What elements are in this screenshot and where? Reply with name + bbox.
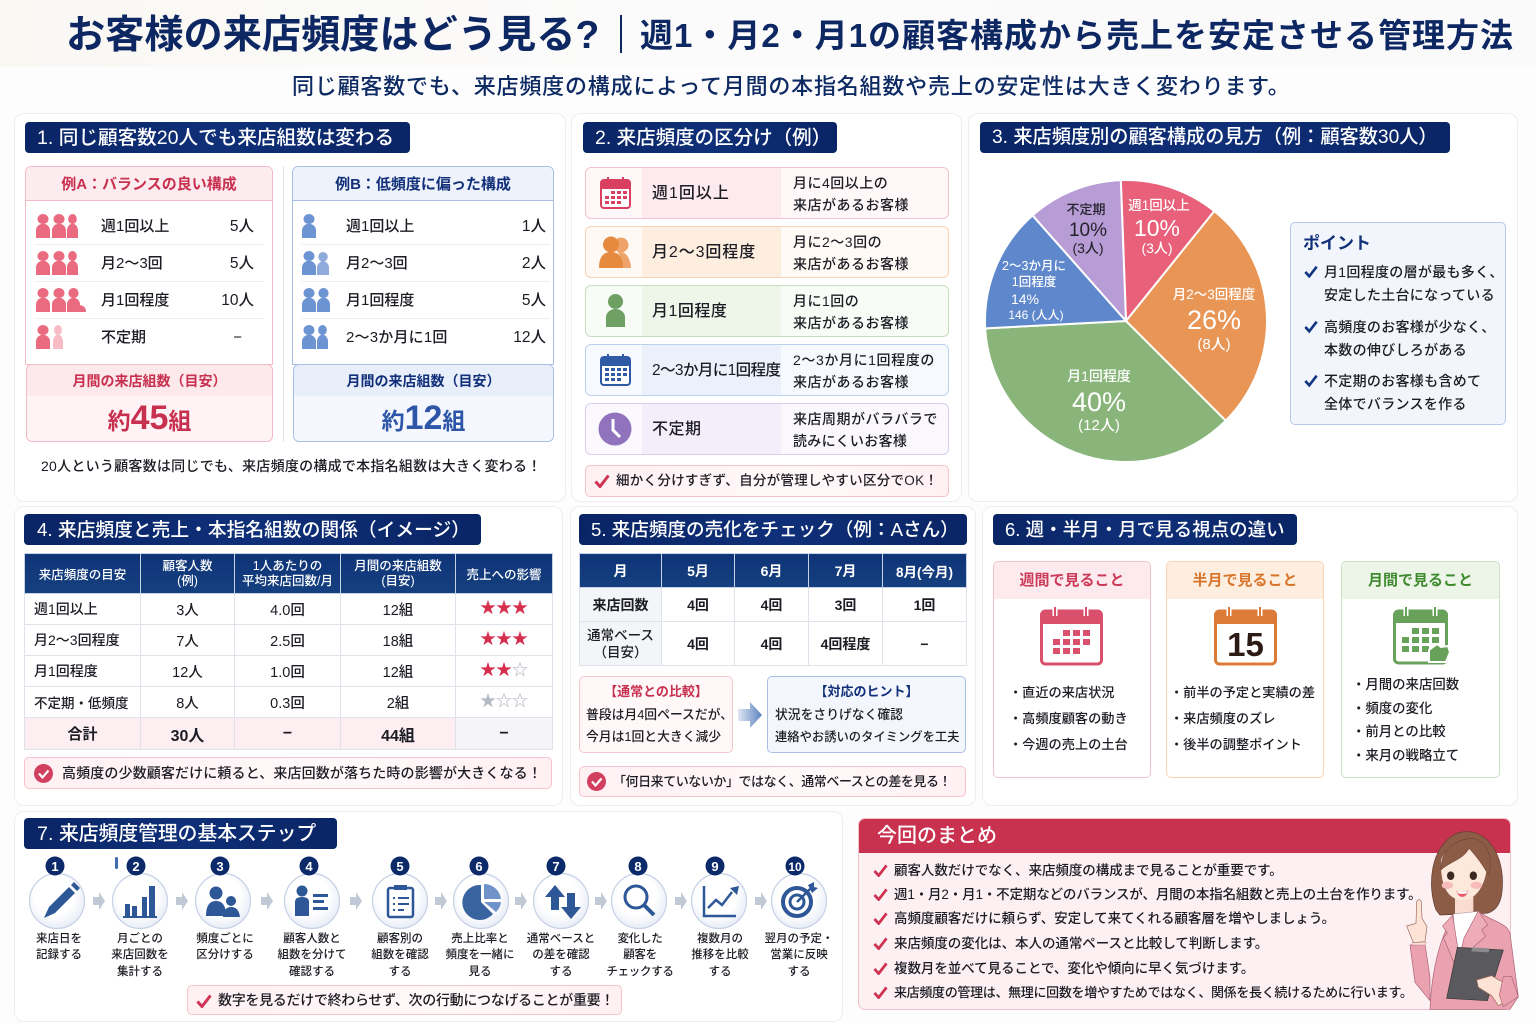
summary checks bbox=[874, 864, 888, 999]
points box: 全体でバランスを作る bbox=[1324, 396, 1467, 412]
table: frequency and sales: 月2〜3回程度 bbox=[34, 632, 120, 648]
step labels: 区分けする bbox=[196, 949, 254, 961]
card: half month: ・来店頻度のズレ bbox=[1170, 711, 1276, 726]
step labels: 組数を確認 bbox=[371, 949, 429, 961]
note 5: 「何日来ていないか」ではなく、通常ベースとの差を見る！ bbox=[613, 774, 951, 789]
steps note bbox=[187, 985, 622, 1015]
steps graphic: 9 bbox=[711, 859, 719, 874]
heading 4 bbox=[24, 514, 481, 545]
panel: 4 relation bbox=[14, 506, 563, 806]
table: A-san visits: 4回 bbox=[761, 636, 782, 652]
steps note: 数字を見るだけで終わらせず、次の行動につなげることが重要！ bbox=[218, 992, 614, 1008]
heading 6: 6. 週・半月・月で見る視点の違い bbox=[1005, 519, 1285, 540]
summary list bbox=[894, 863, 1421, 1000]
table: frequency and sales: 1.0回 bbox=[270, 664, 305, 680]
card: half month: ・後半の調整ポイント bbox=[1170, 737, 1302, 752]
panel: 6 viewpoints bbox=[982, 506, 1518, 806]
heading 5: 5. 来店頻度の売化をチェック（例：Aさん） bbox=[591, 519, 959, 540]
table: frequency and sales: 30人 bbox=[171, 728, 204, 744]
table: frequency and sales: 7人 bbox=[176, 634, 199, 650]
step labels: 見る bbox=[468, 966, 492, 978]
example A heading bbox=[26, 167, 272, 201]
result A bbox=[26, 364, 273, 442]
heading 3: 3. 来店頻度別の顧客構成の見方（例：顧客数30人） bbox=[992, 127, 1438, 148]
example B card bbox=[292, 166, 554, 365]
table: A-san visits: （目安） bbox=[594, 644, 648, 660]
segment tip bbox=[585, 465, 949, 497]
table: frequency and sales: 2組 bbox=[387, 696, 409, 712]
pie chart: 14% bbox=[1011, 291, 1039, 307]
table: frequency and sales: 合計 bbox=[67, 726, 98, 743]
segment row: quarterly: 2〜3か月に1回程度 bbox=[652, 362, 780, 379]
example A rows: 週1回以上 bbox=[101, 218, 169, 235]
arrows updown bbox=[545, 885, 581, 919]
segment row: monthly: 来店があるお客様 bbox=[793, 315, 909, 331]
example A card bbox=[25, 166, 273, 365]
pie chart: (3人) bbox=[1141, 240, 1173, 256]
card: weekly: ・直近の来店状況 bbox=[1009, 685, 1114, 700]
clipboard bbox=[388, 888, 413, 917]
example A rows: 5人 bbox=[230, 255, 254, 272]
steps graphic: 7 bbox=[552, 859, 560, 874]
step labels: 売上比率と bbox=[451, 933, 509, 945]
segment row: 2-3 monthly: 月2〜3回程度 bbox=[652, 244, 756, 261]
segment row: irregular bbox=[585, 403, 949, 455]
heading 7 bbox=[24, 818, 337, 849]
table: A-san visits: 通常ベース bbox=[587, 628, 654, 642]
card: monthly: 月間で見ること bbox=[1368, 572, 1473, 589]
example B rows: 5人 bbox=[522, 292, 546, 309]
example A heading: 例A：バランスの良い構成 bbox=[61, 176, 237, 193]
heading 7: 7. 来店頻度管理の基本ステップ bbox=[37, 823, 316, 845]
table: frequency and sales: ★★☆ bbox=[480, 662, 528, 679]
example B rows bbox=[302, 218, 550, 346]
result B: 月間の来店組数（目安） bbox=[346, 373, 500, 389]
step labels: 頻度を一緒に bbox=[446, 949, 514, 961]
lead sentence: 同じ顧客数でも、来店頻度の構成によって月間の本指名組数や売上の安定性は大きく変わります。 bbox=[292, 74, 1291, 99]
step labels: 組数を分けて bbox=[278, 949, 346, 961]
card: monthly: ・月間の来店回数 bbox=[1352, 677, 1459, 692]
table: A-san visits: 1回 bbox=[914, 596, 935, 612]
table: A-san visits bbox=[579, 553, 967, 666]
icon: green person bbox=[606, 294, 625, 327]
heading 1: 1. 同じ顧客数20人でも来店組数は変わる bbox=[37, 127, 394, 149]
steps graphic: 1 bbox=[51, 859, 59, 874]
table: frequency and sales: − bbox=[499, 724, 509, 742]
example B rows: 2〜3か月に1回 bbox=[346, 329, 448, 346]
example A rows bbox=[35, 218, 263, 346]
summary panel bbox=[858, 818, 1511, 1010]
step labels: の差を確認 bbox=[532, 949, 590, 961]
pie chart: 月2〜3回程度 bbox=[1173, 287, 1256, 302]
table: A-san visits: 4回 bbox=[687, 636, 709, 652]
pie chart: 2〜3か月に bbox=[1002, 259, 1066, 273]
table: frequency and sales: 2.5回 bbox=[270, 634, 305, 650]
segment tip: 細かく分けすぎず、自分が管理しやすい区分でOK！ bbox=[616, 473, 938, 488]
step labels: 営業に反映 bbox=[770, 949, 828, 961]
points heading: ポイント bbox=[1303, 234, 1371, 253]
pie chart: 40% bbox=[1072, 387, 1126, 417]
summary list: 週1・月2・月1・不定期などのバランスが、月間の本指名組数と売上の土台を作ります。 bbox=[894, 887, 1421, 902]
steps graphic: 6 bbox=[475, 859, 483, 874]
table: frequency and sales: 12組 bbox=[383, 664, 413, 680]
table: frequency and sales: 12人 bbox=[172, 664, 203, 680]
icon: calendar 15: 15 bbox=[1227, 626, 1264, 663]
panel: 1 same customers bbox=[14, 113, 566, 502]
steps graphic: 8 bbox=[634, 859, 642, 874]
summary list: 顧客人数だけでなく、来店頻度の構成まで見ることが重要です。 bbox=[894, 863, 1283, 878]
card: weekly: ・高頻度顧客の動き bbox=[1009, 711, 1128, 726]
card: monthly bbox=[1341, 561, 1500, 778]
pie icon bbox=[462, 885, 493, 920]
example B rows: 1人 bbox=[522, 218, 546, 235]
steps graphic bbox=[28, 856, 828, 930]
example B rows: 月1回程度 bbox=[346, 292, 414, 309]
table: frequency and sales: ★★★ bbox=[480, 631, 528, 648]
segment row: 2-3 monthly bbox=[585, 226, 949, 278]
steps graphic: 3 bbox=[216, 859, 224, 874]
card: half month: 半月で見ること bbox=[1192, 572, 1298, 589]
pie chart: (12人) bbox=[1078, 417, 1120, 434]
title band bbox=[0, 0, 1536, 67]
step labels: 顧客人数と bbox=[283, 933, 341, 945]
table: A-san visits: 4回程度 bbox=[821, 636, 870, 652]
panel: 2 segments bbox=[571, 113, 962, 502]
table: frequency and sales: (例) bbox=[177, 574, 198, 588]
card: weekly: 週間で見ること bbox=[1019, 572, 1124, 589]
card: monthly: ・前月との比較 bbox=[1352, 724, 1446, 739]
segment row: weekly bbox=[585, 167, 949, 219]
step labels: 顧客を bbox=[623, 949, 657, 961]
step labels: 来店回数を bbox=[111, 949, 169, 961]
table: A-san visits: − bbox=[920, 636, 929, 652]
hint box bbox=[767, 676, 966, 753]
panel: 7 steps bbox=[14, 811, 843, 1022]
step labels: する bbox=[708, 966, 732, 978]
bars bbox=[125, 904, 130, 916]
card: weekly bbox=[993, 561, 1151, 778]
table: frequency and sales: 月1回程度 bbox=[34, 663, 98, 679]
pencil bbox=[44, 882, 80, 918]
character illustration bbox=[1406, 831, 1519, 1010]
list person bbox=[296, 886, 308, 896]
segment row: irregular: 読みにくいお客様 bbox=[793, 433, 907, 449]
segment row: 2-3 monthly: 来店があるお客様 bbox=[793, 256, 909, 272]
example B rows: 12人 bbox=[513, 329, 546, 346]
example A rows: 不定期 bbox=[101, 329, 146, 346]
example A rows: 5人 bbox=[230, 218, 254, 235]
points box bbox=[1290, 222, 1506, 425]
steps graphic: 4 bbox=[305, 859, 313, 874]
table: frequency and sales bbox=[24, 553, 553, 750]
table: frequency and sales: ★★★ bbox=[480, 600, 528, 617]
segment row: quarterly bbox=[585, 344, 949, 396]
card: half month: ・前半の予定と実績の差 bbox=[1170, 685, 1315, 700]
step labels: 頻度ごとに bbox=[196, 933, 254, 945]
magnifier bbox=[625, 886, 647, 908]
card: weekly: ・今週の売上の土台 bbox=[1009, 737, 1128, 752]
title divider bbox=[620, 15, 622, 53]
points box: 本数の伸びしろがある bbox=[1324, 342, 1467, 358]
segment row: monthly bbox=[585, 285, 949, 337]
example A rows: 月2〜3回 bbox=[101, 255, 163, 272]
step labels: 変化した bbox=[618, 933, 662, 945]
heading 5 bbox=[579, 514, 967, 545]
pie chart: 週1回以上 bbox=[1128, 198, 1190, 213]
segment row: weekly: 週1回以上 bbox=[652, 185, 730, 202]
example A rows: 月1回程度 bbox=[101, 292, 169, 309]
table: frequency and sales: − bbox=[283, 724, 292, 742]
people bbox=[210, 886, 222, 900]
step labels: する bbox=[788, 966, 810, 978]
icon: orange people bbox=[599, 236, 631, 268]
step labels: 通常ベースと bbox=[527, 933, 595, 945]
table: frequency and sales: 不定期・低頻度 bbox=[34, 696, 128, 711]
segment row: quarterly: 2〜3か月に1回程度の bbox=[793, 352, 935, 368]
result A: 約45組 bbox=[108, 399, 191, 437]
heading 2 bbox=[583, 122, 837, 153]
table: A-san visits: 6月 bbox=[761, 562, 782, 578]
step labels: 記録する bbox=[36, 949, 82, 961]
result B bbox=[293, 364, 554, 442]
result A: 月間の来店組数（目安） bbox=[72, 373, 226, 389]
segment row: irregular: 来店周期がバラバラで bbox=[793, 411, 938, 427]
segment row: monthly: 月に1回の bbox=[793, 293, 859, 309]
arrow bbox=[738, 702, 762, 728]
pie chart: (8人) bbox=[1197, 336, 1231, 353]
points box: 高頻度のお客様が少なく、 bbox=[1324, 319, 1496, 335]
card: monthly: ・来月の戦略立て bbox=[1352, 748, 1459, 763]
step labels: 集計する bbox=[117, 966, 163, 978]
step labels: 推移を比較 bbox=[691, 949, 749, 961]
panel: 5 change check bbox=[570, 506, 976, 806]
table: frequency and sales: 月間の来店組数 bbox=[354, 558, 442, 572]
table: frequency and sales: ★☆☆ bbox=[480, 693, 528, 710]
icons: people A bbox=[36, 214, 86, 349]
pie chart: 10% bbox=[1134, 215, 1180, 241]
table: frequency and sales: 12組 bbox=[383, 602, 413, 618]
summary list: 来店頻度の管理は、無理に回数を増やすためではなく、関係を長く続けるために行います。 bbox=[894, 985, 1413, 1000]
heading 2: 2. 来店頻度の区分け（例） bbox=[595, 127, 831, 149]
step labels: 顧客別の bbox=[377, 933, 423, 945]
card: monthly: ・頻度の変化 bbox=[1352, 701, 1432, 716]
table: frequency and sales: 4.0回 bbox=[270, 602, 305, 618]
pie chart: 146 (人人) bbox=[1008, 308, 1064, 322]
pie chart: 月1回程度 bbox=[1067, 368, 1131, 384]
hint box: 連絡やお誘いのタイミングを工夫 bbox=[775, 730, 959, 744]
table: frequency and sales: 3人 bbox=[176, 602, 199, 618]
table: frequency and sales: (目安) bbox=[381, 574, 415, 588]
table: A-san visits: 7月 bbox=[835, 562, 856, 578]
pie chart: 不定期 bbox=[1066, 202, 1106, 217]
table: A-san visits: 4回 bbox=[687, 596, 709, 612]
segment row: irregular: 不定期 bbox=[652, 421, 702, 438]
hint box: 状況をさりげなく確認 bbox=[775, 707, 903, 722]
target bbox=[783, 888, 811, 916]
table: A-san visits: 4回 bbox=[761, 596, 782, 612]
steps graphic: 5 bbox=[396, 859, 404, 874]
step labels: 月ごとの bbox=[117, 933, 163, 945]
result B: 約12組 bbox=[382, 399, 465, 437]
steps graphic: 10 bbox=[788, 860, 802, 874]
example B rows: 2人 bbox=[522, 255, 546, 272]
compare box bbox=[579, 676, 733, 753]
line chart bbox=[704, 886, 736, 916]
summary list: 複数月を並べて見ることで、変化や傾向に早く気づけます。 bbox=[894, 961, 1254, 976]
compare box: 今月は1回と大きく減少 bbox=[586, 729, 721, 744]
points box: 安定した土台になっている bbox=[1324, 287, 1495, 303]
compare box: 【通常との比較】 bbox=[604, 684, 708, 699]
summary list: 来店頻度の変化は、本人の通常ペースと比較して判断します。 bbox=[894, 936, 1268, 951]
table: A-san visits: 来店回数 bbox=[592, 596, 648, 612]
table: A-san visits: 月 bbox=[614, 562, 628, 578]
table: frequency and sales: 来店頻度の目安 bbox=[39, 568, 126, 582]
icon: calendar 15 bbox=[1214, 607, 1277, 666]
table: A-san visits: 5月 bbox=[687, 562, 709, 578]
pie chart: (3人) bbox=[1072, 240, 1104, 256]
table: A-san visits: 8月(今月) bbox=[896, 564, 953, 580]
segment row: 2-3 monthly: 月に2〜3回の bbox=[793, 234, 882, 250]
panel 1 takeaway: 20人という顧客数は同じでも、来店頻度の構成で本指名組数は大きく変わる！ bbox=[41, 458, 542, 474]
example A rows: 10人 bbox=[221, 292, 254, 309]
summary list: 高頻度顧客だけに頼らず、安定して来てくれる顧客層を増やしましょう。 bbox=[894, 911, 1335, 926]
step labels: 翌月の予定・ bbox=[764, 933, 834, 945]
table: frequency and sales: 平均来店回数/月 bbox=[242, 574, 333, 588]
note 4: 高頻度の少数顧客だけに頼ると、来店回数が落ちた時の影響が大きくなる！ bbox=[62, 765, 542, 781]
heading 4: 4. 来店頻度と売上・本指名組数の関係（イメージ） bbox=[37, 519, 470, 540]
step labels: する bbox=[388, 966, 412, 978]
step labels: 複数月の bbox=[697, 933, 743, 945]
table: frequency and sales: 8人 bbox=[176, 696, 199, 712]
pie chart: 10% bbox=[1069, 220, 1107, 241]
table: frequency and sales: 44組 bbox=[381, 728, 415, 744]
table: frequency and sales: 売上への影響 bbox=[466, 568, 542, 582]
step labels: チェックする bbox=[606, 966, 674, 978]
segment row: weekly: 月に4回以上の bbox=[793, 175, 888, 191]
note 5 bbox=[579, 766, 966, 797]
table: A-san visits: 3回 bbox=[835, 596, 856, 612]
note 4 bbox=[24, 757, 552, 789]
compare box: 普段は月4回ペースだが、 bbox=[586, 707, 733, 722]
table: frequency and sales: 週1回以上 bbox=[34, 601, 98, 617]
step labels: する bbox=[550, 966, 572, 978]
heading 3 bbox=[980, 122, 1450, 153]
heading 6 bbox=[993, 514, 1297, 545]
table: frequency and sales: 18組 bbox=[383, 634, 413, 650]
hint box: 【対応のヒント】 bbox=[814, 684, 918, 699]
icon: blue calendar bbox=[600, 354, 631, 386]
segment row: weekly: 来店があるお客様 bbox=[793, 197, 909, 213]
step labels: 来店日を bbox=[36, 933, 82, 945]
points box: 不定期のお客様も含めて bbox=[1324, 373, 1481, 389]
step labels: 確認する bbox=[289, 966, 335, 978]
step labels bbox=[36, 932, 834, 978]
icon: monthly calendar bbox=[1393, 607, 1449, 664]
icon: weekly calendar bbox=[1040, 607, 1103, 666]
example B heading bbox=[293, 167, 553, 201]
icons: people B bbox=[302, 214, 330, 349]
segment row: quarterly: 来店があるお客様 bbox=[793, 374, 909, 390]
steps graphic: 2 bbox=[132, 859, 140, 874]
table: frequency and sales: 1人あたりの bbox=[253, 558, 322, 572]
pie chart bbox=[986, 181, 1266, 461]
icon: clock bbox=[598, 412, 632, 446]
example B rows: 月2〜3回 bbox=[346, 255, 408, 272]
example A rows: − bbox=[233, 329, 242, 346]
divider A B bbox=[283, 166, 284, 442]
table: frequency and sales: 顧客人数 bbox=[162, 558, 212, 572]
icon: red calendar bbox=[600, 177, 631, 209]
summary heading bbox=[859, 819, 1510, 853]
title: お客様の来店頻度はどう見る? bbox=[66, 14, 599, 57]
points box: 月1回程度の層が最も多く、 bbox=[1324, 264, 1504, 280]
example B heading: 例B：低頻度に偏った構成 bbox=[335, 176, 511, 193]
pie chart: 26% bbox=[1187, 305, 1241, 335]
segment row: monthly: 月1回程度 bbox=[652, 303, 727, 320]
summary heading: 今回のまとめ bbox=[877, 825, 997, 847]
heading 1 bbox=[25, 122, 410, 153]
card: half month bbox=[1166, 561, 1324, 778]
table: frequency and sales: 0.3回 bbox=[270, 696, 305, 712]
panel: 3 composition bbox=[968, 113, 1518, 502]
pie chart: 1回程度 bbox=[1012, 274, 1057, 289]
example B rows: 週1回以上 bbox=[346, 218, 414, 235]
subtitle of title: 週1・月2・月1の顧客構成から売上を安定させる管理方法 bbox=[640, 17, 1514, 54]
